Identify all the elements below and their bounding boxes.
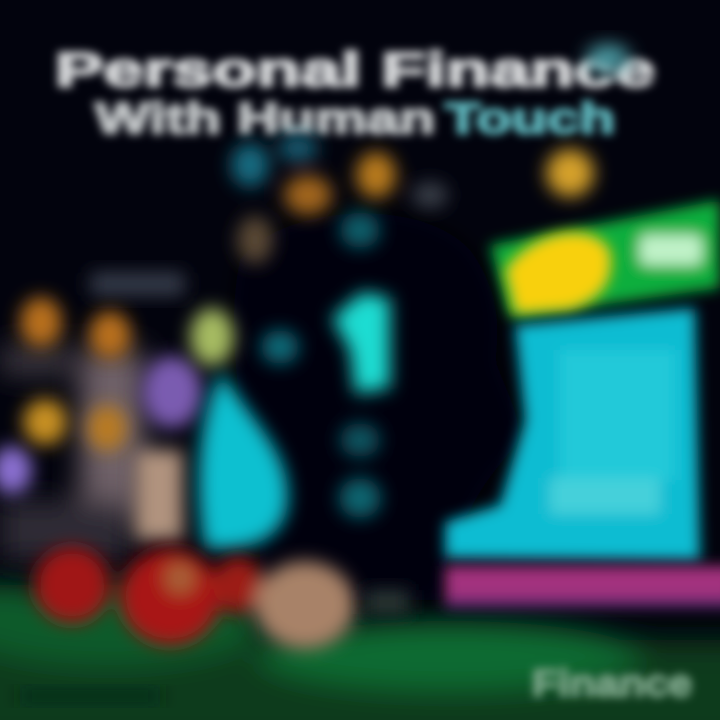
head silhouette [234,213,518,600]
top icons: cyan and orange dots [231,134,594,264]
left group: orange and yellow coins [20,297,234,451]
red and tan spheres [34,547,355,649]
right panel: cyan bars [445,308,700,560]
title accent [586,44,630,72]
cyan droplet [199,372,288,549]
footer logo: Finance [532,663,692,705]
right panel: yellow badge [505,232,611,314]
title [55,44,655,143]
left label [90,272,185,296]
title: Touch [445,94,615,143]
cyan head icons [261,212,390,518]
title: Personal Finance [55,44,655,97]
right panel: green banner [490,200,720,318]
ground: green floor [0,585,720,720]
title: With Human [95,94,435,143]
faint bottom-left caption [20,690,160,702]
left group: building panels [0,345,145,560]
left group: purple and tan shapes [0,356,202,540]
small grey mark near head base [365,590,410,614]
right panel: magenta base [445,566,720,608]
